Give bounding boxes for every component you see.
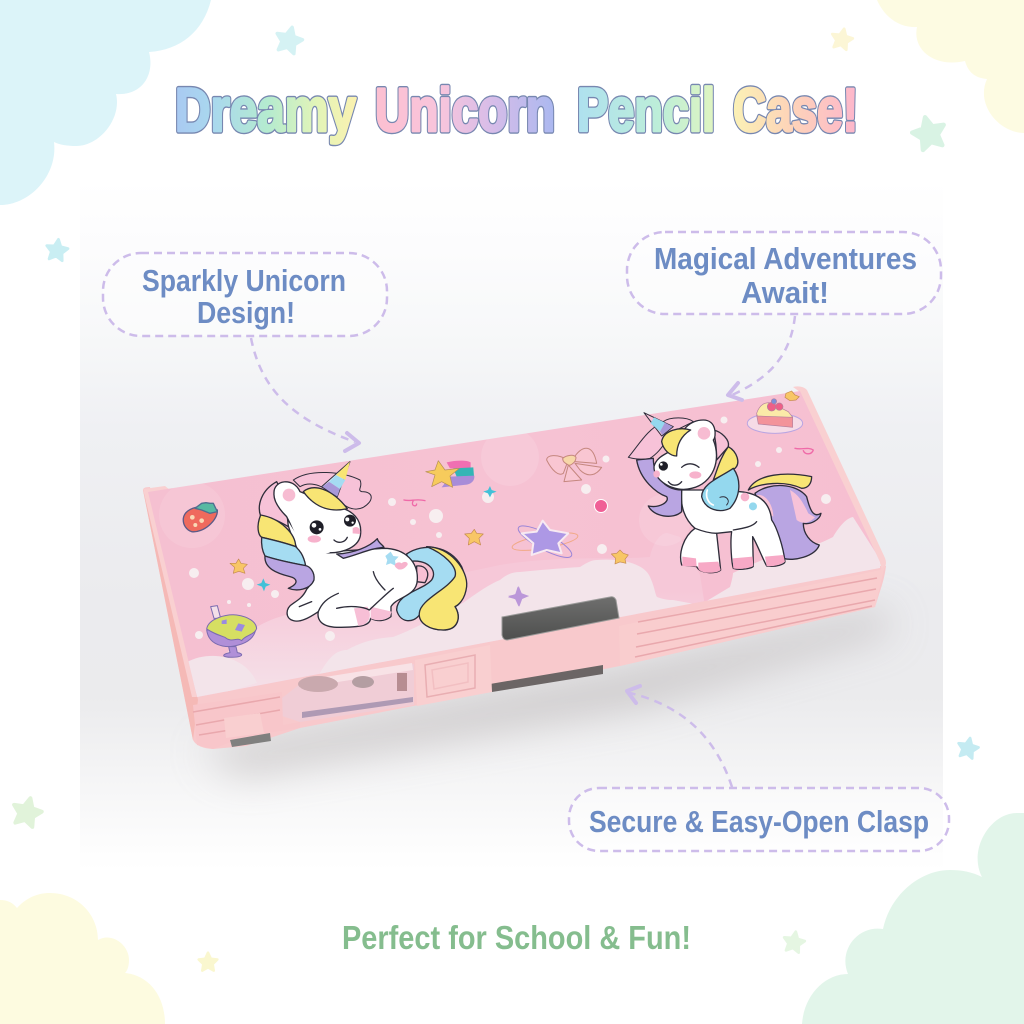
pony body bbox=[287, 520, 417, 627]
right artwork bbox=[508, 391, 821, 607]
title bbox=[175, 76, 858, 144]
right mane back bbox=[713, 430, 738, 480]
forelock bbox=[293, 472, 371, 509]
title: Unicorn bbox=[375, 76, 555, 144]
callout: secure clasp: Secure & Easy-Open Clasp bbox=[589, 804, 929, 839]
cloud: top right bbox=[877, 0, 1024, 133]
scarf bbox=[337, 539, 384, 558]
cake bbox=[747, 399, 803, 433]
ridged right side bbox=[619, 565, 885, 666]
arrow: to unicorn bbox=[251, 338, 359, 451]
title: Pencil bbox=[577, 76, 715, 144]
bubbles bbox=[159, 482, 225, 548]
callout: magical adventures: Magical Adventures bbox=[654, 241, 917, 276]
arrow: to magic unicorn bbox=[728, 316, 795, 400]
mane bbox=[258, 482, 314, 590]
pale cloud print bbox=[227, 592, 704, 690]
lid printed surface bbox=[140, 380, 890, 710]
rainbow star bbox=[426, 461, 474, 487]
title: Unicorn bbox=[375, 76, 555, 144]
cloud: bottom right bbox=[802, 813, 1024, 1024]
left mane bbox=[637, 458, 682, 516]
tail bbox=[748, 474, 821, 559]
head bbox=[274, 482, 361, 553]
ice cream bbox=[207, 606, 257, 657]
head bbox=[654, 420, 716, 489]
small stars and sparkles bbox=[230, 529, 483, 573]
left foot details bbox=[193, 692, 300, 749]
callout: magical adventures: Await! bbox=[741, 275, 829, 310]
tagline: Perfect for School & Fun! bbox=[342, 919, 691, 956]
title: Pencil bbox=[577, 76, 715, 144]
photo backdrop bbox=[80, 180, 943, 870]
lid rim bbox=[143, 386, 886, 697]
face bbox=[653, 427, 710, 485]
callout: magical adventures bbox=[627, 232, 941, 314]
sparkle dots bbox=[189, 416, 831, 641]
title: Case! bbox=[733, 76, 858, 144]
arrow: to clasp bbox=[627, 686, 732, 787]
face bbox=[283, 489, 360, 543]
callout: secure clasp bbox=[569, 788, 949, 851]
case body side and front bbox=[143, 487, 886, 749]
cloud: bottom left bbox=[0, 893, 165, 1024]
star bbox=[611, 550, 628, 564]
transparent window bbox=[282, 663, 414, 722]
pony body bbox=[681, 490, 785, 573]
corner cloud print bbox=[188, 656, 250, 697]
clasp band bbox=[486, 625, 611, 684]
bow bbox=[547, 448, 602, 482]
callout: sparkly design: Sparkly Unicorn bbox=[142, 263, 346, 298]
title: Dreamy bbox=[175, 76, 356, 144]
case shadow bbox=[200, 610, 895, 775]
horn bbox=[322, 462, 350, 497]
callout: sparkly design bbox=[103, 253, 387, 336]
left side shading bbox=[143, 488, 198, 740]
horn bbox=[644, 413, 673, 436]
left artwork bbox=[183, 461, 529, 657]
tail bbox=[397, 547, 467, 630]
lower metal bar bbox=[490, 665, 603, 692]
white cloud print bbox=[321, 517, 880, 674]
metal clasp bbox=[502, 597, 619, 640]
cloud: top left bbox=[0, 0, 211, 205]
title: Dreamy bbox=[175, 76, 356, 144]
blue mane curl bbox=[702, 468, 739, 511]
strawberry bbox=[183, 503, 217, 532]
callout: sparkly design: Design! bbox=[197, 295, 295, 330]
head fill over neck bbox=[288, 517, 330, 557]
pink dot bbox=[594, 500, 608, 512]
square button bbox=[415, 645, 492, 706]
planet star bbox=[511, 521, 579, 563]
forelock bbox=[628, 418, 693, 459]
pencil case bbox=[140, 380, 890, 749]
title: Case! bbox=[733, 76, 858, 144]
